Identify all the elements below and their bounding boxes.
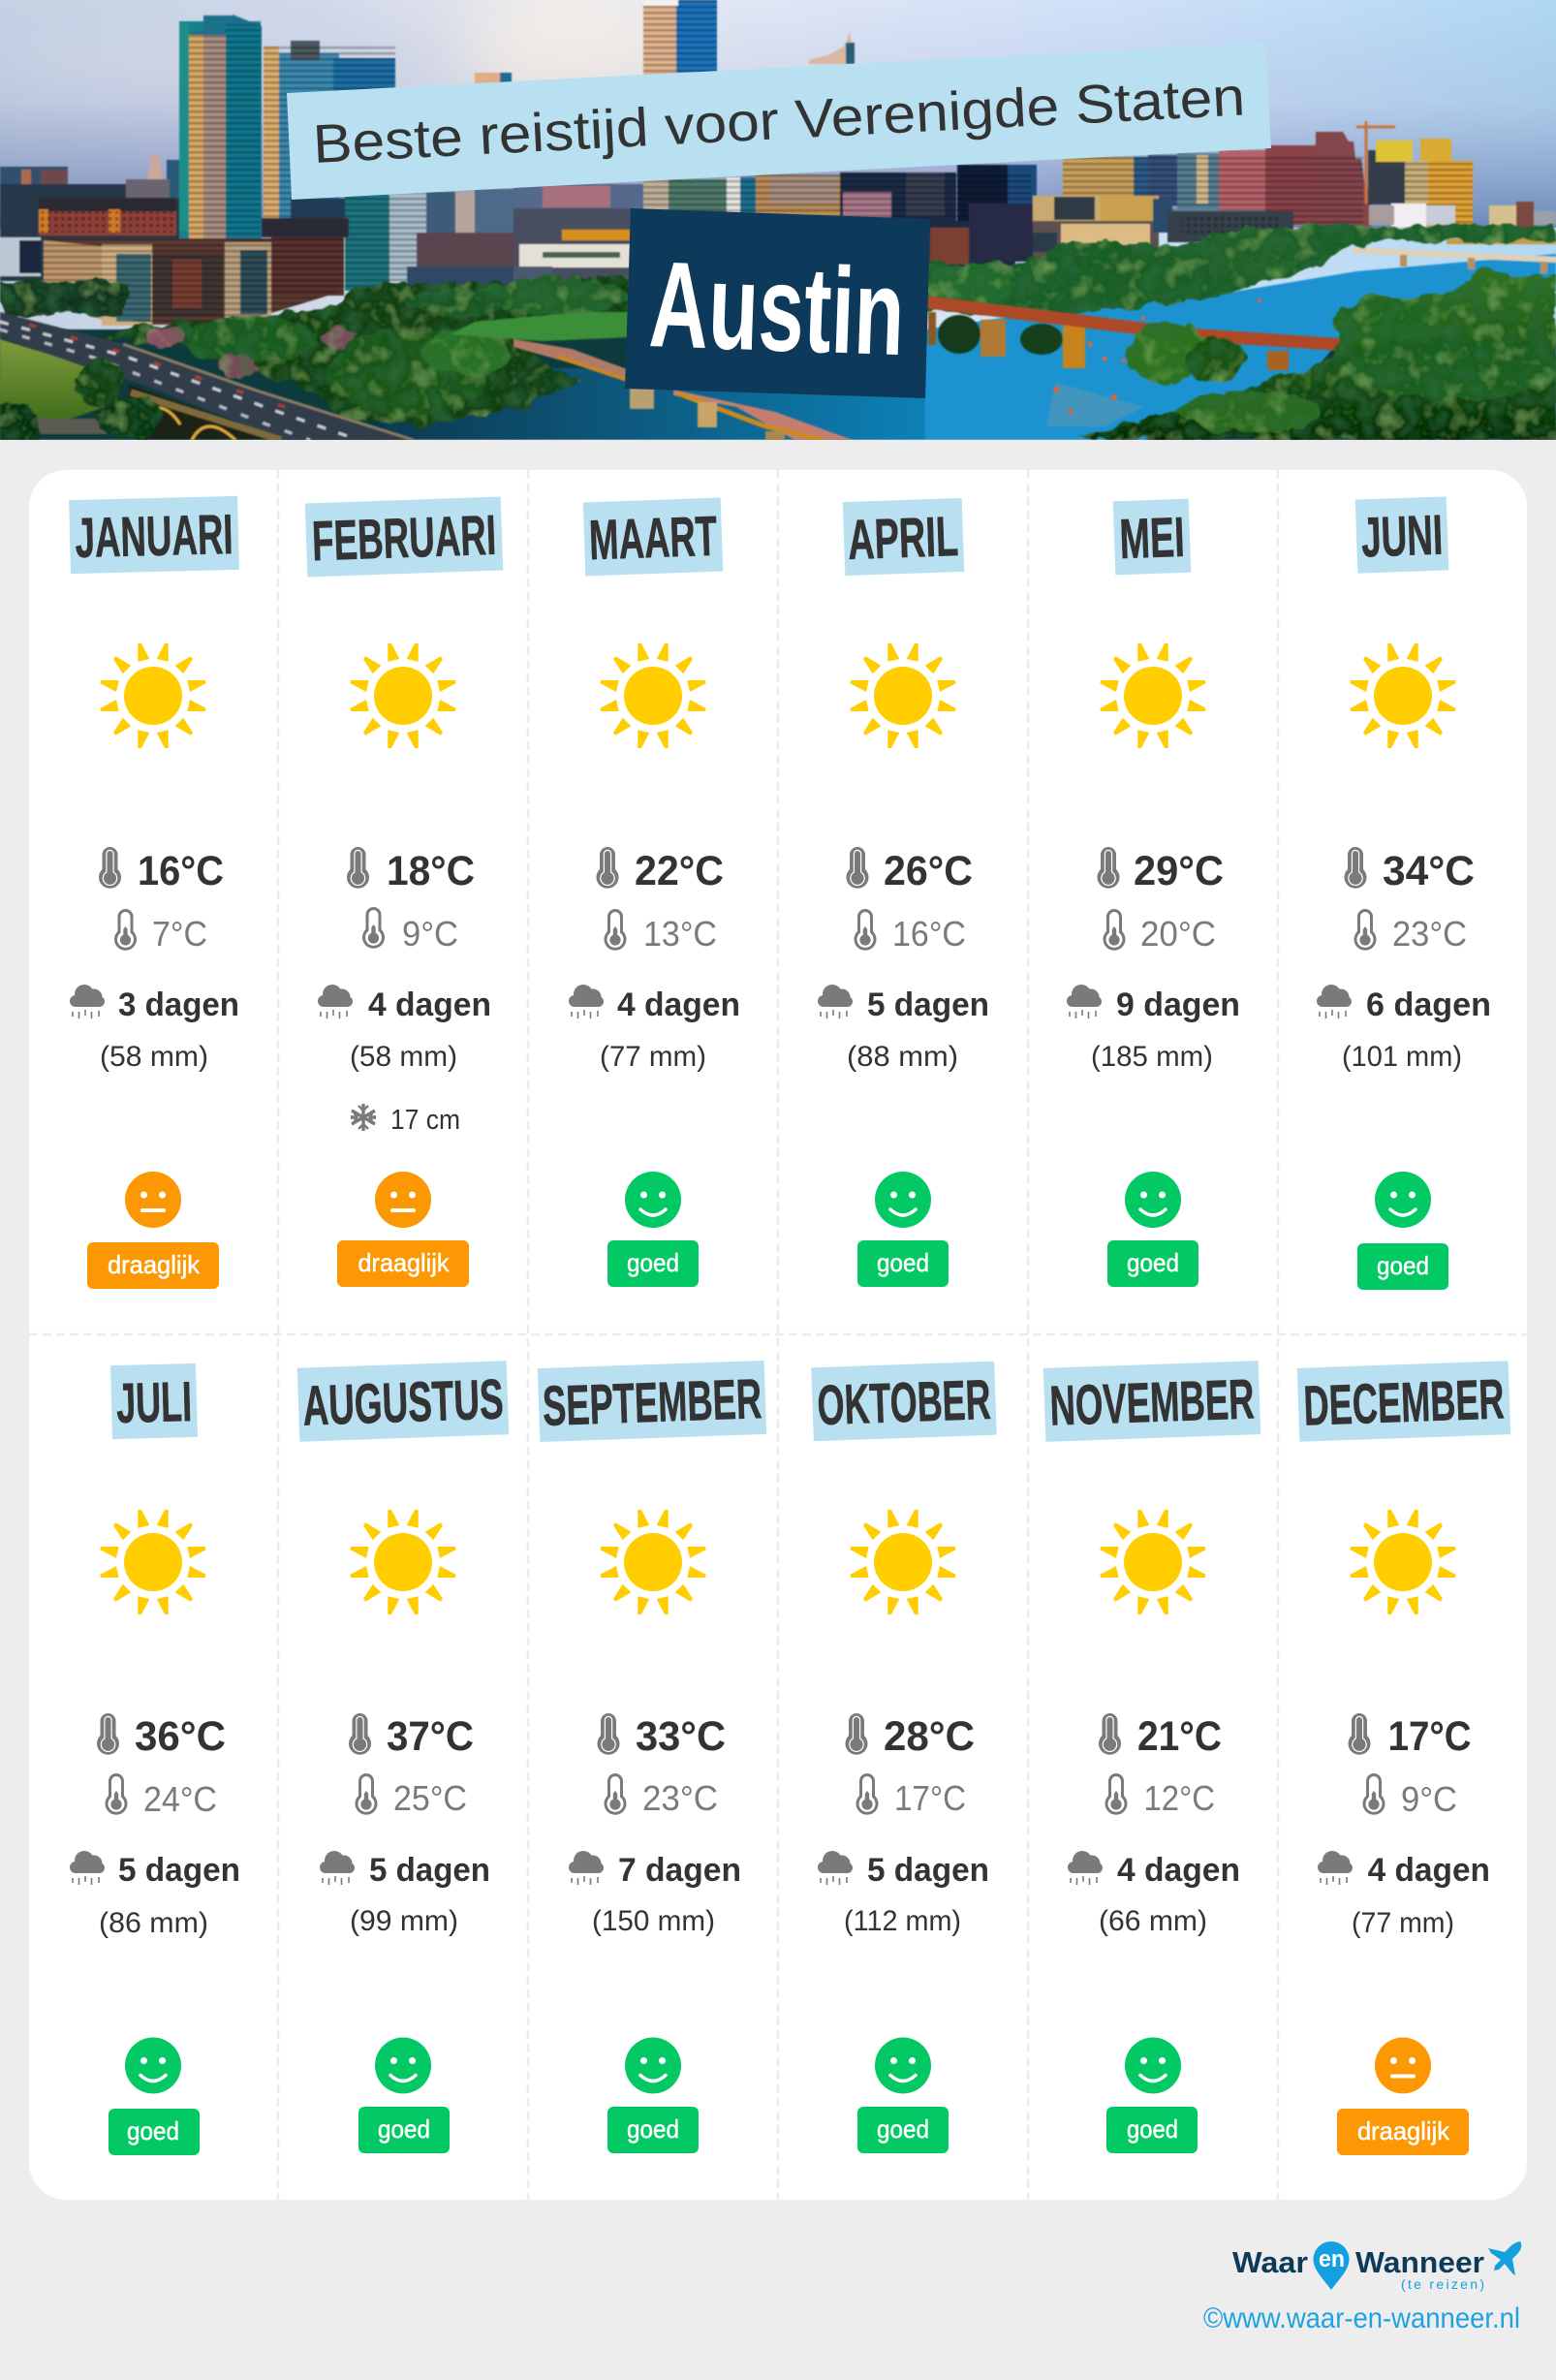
min temperature xyxy=(855,909,966,954)
icon: snowflake xyxy=(351,1104,376,1131)
rain days xyxy=(1067,985,1240,1023)
rating badge: goed xyxy=(627,1248,679,1277)
max temperature: 22°C xyxy=(635,848,724,894)
heading maart: MAART xyxy=(588,505,718,572)
rain days xyxy=(569,985,740,1023)
rain days: 5 dagen xyxy=(867,1852,989,1889)
heading april: APRIL xyxy=(847,505,959,572)
rating icon xyxy=(1375,2037,1431,2093)
heading juli: JULI xyxy=(115,1370,193,1435)
rating badge: goed xyxy=(877,1248,929,1277)
rating badge: draaglijk xyxy=(108,1250,201,1279)
icon: sun xyxy=(600,643,706,748)
min temperature: 23°C xyxy=(642,1778,718,1818)
rain days: 5 dagen xyxy=(118,1852,240,1889)
min temperature xyxy=(1103,909,1216,954)
month: augustus xyxy=(297,1361,509,2153)
rain days: 4 dagen xyxy=(368,986,491,1023)
heading maart xyxy=(583,498,723,576)
rating icon xyxy=(375,2037,431,2093)
panel: month cards xyxy=(29,470,1527,2200)
max temperature xyxy=(1349,1713,1472,1760)
heading januari: JANUARI xyxy=(75,503,233,570)
heading februari xyxy=(305,496,503,578)
heading september xyxy=(538,1361,766,1442)
rating icon xyxy=(375,1172,431,1228)
rainfall: (88 mm) xyxy=(847,1041,958,1073)
month: mei xyxy=(1067,499,1240,1287)
max temperature: 34°C xyxy=(1383,848,1475,894)
rain days: 4 dagen xyxy=(617,986,740,1023)
min temperature xyxy=(355,1773,467,1818)
min temperature: 9°C xyxy=(1401,1779,1457,1819)
month: april xyxy=(818,498,989,1287)
max temperature: 17°C xyxy=(1388,1713,1472,1760)
min temperature xyxy=(1354,909,1467,954)
rating badge: goed xyxy=(1127,1248,1179,1277)
website url: ©www.waar-en-wanneer.nl xyxy=(1203,2302,1520,2334)
rain days: 5 dagen xyxy=(369,1852,490,1889)
rating badge xyxy=(857,2107,949,2153)
rainfall: (99 mm) xyxy=(350,1905,458,1937)
rain days xyxy=(70,1851,240,1889)
rainfall: (66 mm) xyxy=(1099,1905,1207,1937)
rain days: 5 dagen xyxy=(867,986,989,1023)
month: januari xyxy=(69,496,239,1289)
rating icon xyxy=(125,1172,181,1228)
month: oktober xyxy=(811,1362,997,2153)
month: september xyxy=(538,1361,766,2153)
icon: sun xyxy=(1100,643,1206,748)
rain days: 4 dagen xyxy=(1117,1852,1240,1889)
rating badge xyxy=(87,1242,219,1289)
max temperature: 37°C xyxy=(387,1713,474,1760)
max temperature xyxy=(1099,1713,1222,1760)
rating icon xyxy=(875,1172,931,1228)
rating badge: goed xyxy=(877,2114,929,2144)
title text: Beste reistijd voor Verenigde Staten xyxy=(311,66,1246,174)
rating badge: goed xyxy=(378,2114,430,2144)
min temperature xyxy=(856,1773,966,1818)
rating badge xyxy=(1106,2107,1198,2153)
min temperature: 13°C xyxy=(643,914,717,954)
icon: map pin: en xyxy=(1319,2246,1345,2272)
heading januari xyxy=(69,496,239,574)
icon: sun xyxy=(600,1510,706,1614)
icon: sun xyxy=(350,643,456,748)
rating badge xyxy=(337,1240,469,1287)
max temperature: 26°C xyxy=(884,848,973,894)
heading juli xyxy=(110,1363,198,1439)
heading september: SEPTEMBER xyxy=(542,1367,762,1438)
rating badge: goed xyxy=(1377,1251,1429,1280)
rating icon xyxy=(625,1172,681,1228)
rating icon xyxy=(1125,2037,1181,2093)
rain days: 4 dagen xyxy=(1368,1852,1490,1889)
max temperature: 28°C xyxy=(884,1713,975,1760)
max temperature xyxy=(597,847,724,894)
max temperature xyxy=(347,847,475,894)
rain days xyxy=(1318,1851,1490,1889)
rain days xyxy=(569,1851,741,1889)
heading mei xyxy=(1113,499,1191,575)
rainfall: (185 mm) xyxy=(1091,1041,1213,1073)
heading november xyxy=(1043,1361,1260,1442)
month: juni xyxy=(1317,496,1491,1290)
max temperature xyxy=(845,1713,975,1760)
max temperature xyxy=(597,1713,726,1760)
month: november xyxy=(1043,1361,1260,2153)
max temperature: 29°C xyxy=(1134,848,1224,894)
heading mei: MEI xyxy=(1118,506,1186,571)
min temperature: 7°C xyxy=(152,914,207,954)
snowfall: 17 cm xyxy=(390,1105,460,1136)
min temperature: 25°C xyxy=(393,1778,467,1818)
min temperature xyxy=(605,909,717,954)
min temperature xyxy=(114,909,207,954)
max temperature xyxy=(349,1713,474,1760)
month: maart xyxy=(569,498,740,1287)
rating badge xyxy=(1357,1243,1448,1290)
rainfall: (77 mm) xyxy=(600,1041,706,1073)
rating badge xyxy=(109,2109,200,2155)
rain days xyxy=(320,1851,490,1889)
month: juli xyxy=(70,1363,240,2155)
month: december xyxy=(1297,1361,1510,2155)
rating icon xyxy=(1375,1172,1431,1228)
min temperature: 16°C xyxy=(892,914,966,954)
rating icon xyxy=(625,2037,681,2093)
max temperature: 36°C xyxy=(135,1713,226,1760)
min temperature: 23°C xyxy=(1392,914,1467,954)
min temperature: 20°C xyxy=(1140,914,1216,954)
heading augustus xyxy=(297,1361,509,1442)
rating badge: goed xyxy=(127,2116,179,2145)
rain days: 7 dagen xyxy=(618,1852,741,1889)
city name: Austin xyxy=(647,235,907,381)
max temperature xyxy=(847,847,973,894)
heading juni xyxy=(1355,496,1448,574)
rainfall: (58 mm) xyxy=(350,1041,457,1073)
rainfall: (101 mm) xyxy=(1342,1041,1462,1073)
heading oktober: OKTOBER xyxy=(816,1368,992,1437)
logo: Waar en Wanneer: (te reizen) xyxy=(1401,2276,1484,2292)
heading oktober xyxy=(811,1362,997,1441)
icon: sun xyxy=(850,643,956,748)
icon: sun xyxy=(1350,643,1456,748)
month: februari xyxy=(305,496,503,1287)
max temperature: 18°C xyxy=(387,848,475,894)
rain days: 3 dagen xyxy=(118,986,239,1023)
rainfall: (86 mm) xyxy=(99,1907,208,1939)
heading februari: FEBRUARI xyxy=(311,504,497,573)
logo: Waar en Wanneer xyxy=(1232,2241,1521,2292)
min temperature: 9°C xyxy=(402,914,458,954)
heading november: NOVEMBER xyxy=(1048,1367,1256,1438)
icon: sun xyxy=(850,1510,956,1614)
rating badge xyxy=(1337,2109,1469,2155)
icon: sun xyxy=(350,1510,456,1614)
min temperature: 12°C xyxy=(1143,1778,1215,1818)
rating badge: goed xyxy=(1127,2114,1178,2144)
logo: Waar en Wanneer: Waar xyxy=(1232,2245,1308,2279)
rating badge xyxy=(358,2107,450,2153)
rating icon xyxy=(1125,1172,1181,1228)
rating badge xyxy=(607,1240,699,1287)
rating badge: draaglijk xyxy=(358,1248,450,1277)
min temperature xyxy=(362,907,458,954)
rating icon xyxy=(875,2037,931,2093)
hero photo: Austin skyline and river xyxy=(0,0,1556,450)
rainfall: (77 mm) xyxy=(1352,1907,1454,1939)
rainfall: (58 mm) xyxy=(100,1041,208,1073)
heading april xyxy=(843,498,964,576)
heading juni: JUNI xyxy=(1360,504,1444,569)
rain days xyxy=(818,985,989,1023)
rain days xyxy=(818,1851,989,1889)
min temperature: 17°C xyxy=(894,1778,966,1818)
max temperature xyxy=(97,1713,226,1760)
city banner xyxy=(625,208,930,398)
icon: sun xyxy=(100,643,206,748)
rain days: 6 dagen xyxy=(1366,986,1491,1023)
rating badge xyxy=(607,2107,699,2153)
rain days xyxy=(1068,1851,1240,1889)
rainfall: (112 mm) xyxy=(844,1905,961,1937)
icon: sun xyxy=(1350,1510,1456,1614)
rating badge: draaglijk xyxy=(1357,2116,1450,2145)
rainfall: (150 mm) xyxy=(592,1905,715,1937)
title banner xyxy=(287,43,1271,200)
max temperature xyxy=(1345,847,1475,894)
rain days xyxy=(318,985,491,1023)
max temperature: 21°C xyxy=(1137,1713,1222,1760)
rating badge xyxy=(857,1240,949,1287)
min temperature xyxy=(605,1773,718,1818)
min temperature: 24°C xyxy=(143,1779,217,1819)
max temperature: 16°C xyxy=(138,848,224,894)
rain days xyxy=(1317,985,1491,1023)
min temperature xyxy=(1105,1773,1215,1818)
icon: plane xyxy=(1488,2241,1521,2275)
logo: Waar en Wanneer: Wanneer xyxy=(1355,2245,1484,2279)
rain days: 9 dagen xyxy=(1116,986,1240,1023)
rain days xyxy=(70,985,239,1023)
max temperature xyxy=(99,847,224,894)
rating badge: goed xyxy=(627,2114,679,2144)
rating badge xyxy=(1107,1240,1198,1287)
min temperature xyxy=(105,1773,217,1819)
icon: sun xyxy=(1100,1510,1206,1614)
max temperature xyxy=(1097,847,1224,894)
min temperature xyxy=(1362,1773,1457,1819)
icon: sun xyxy=(100,1510,206,1614)
max temperature: 33°C xyxy=(636,1713,726,1760)
icon: map pin xyxy=(1314,2241,1349,2290)
heading augustus: AUGUSTUS xyxy=(301,1367,505,1438)
rating icon xyxy=(125,2037,181,2093)
